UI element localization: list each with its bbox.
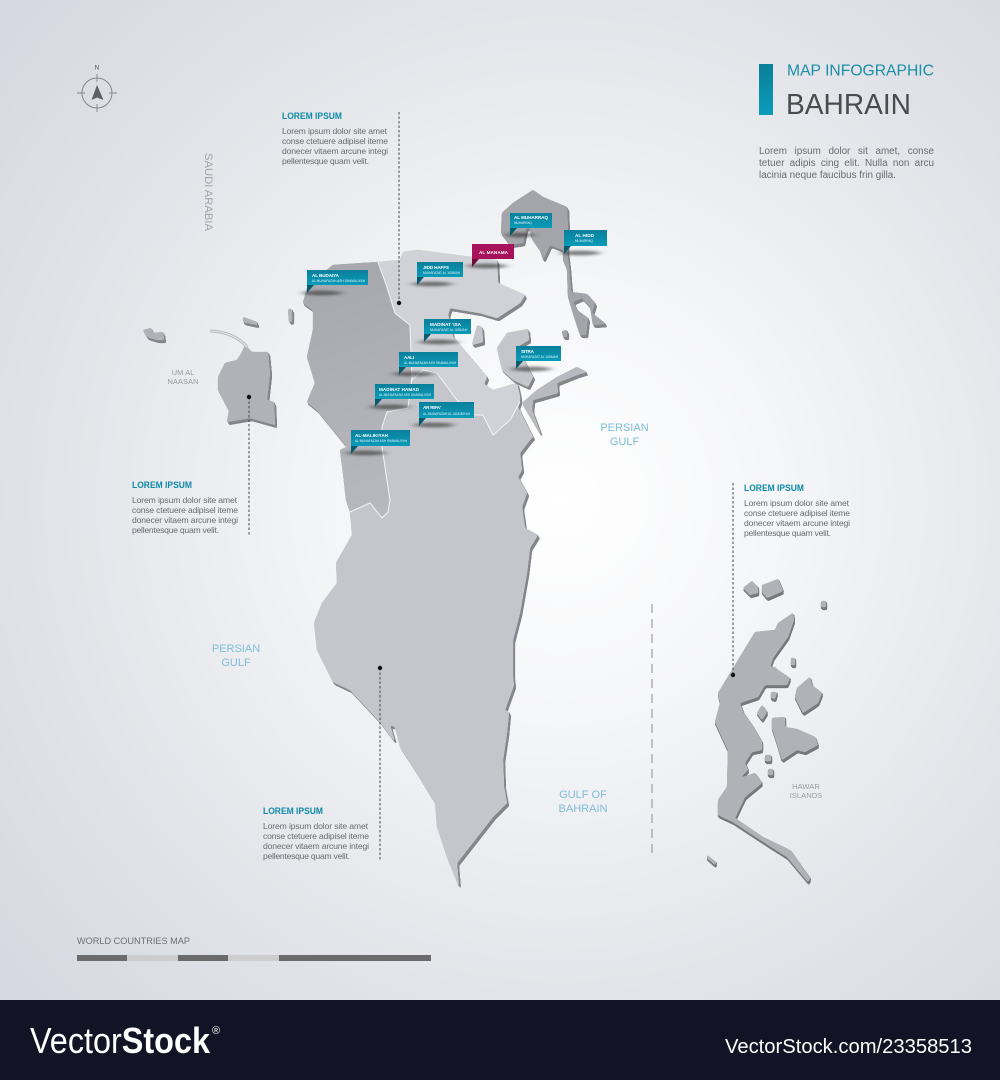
water label: Persian Gulf east: GULF [610,436,639,448]
flag: Al Muharraq: AL MUHARRAQ [514,215,548,220]
callout: south [263,666,382,861]
title block: MAP INFOGRAPHIC [787,62,934,80]
intro text: lacinia neque faucibus frin gilla. [759,170,896,181]
callout: east: pellentesque quam velit. [744,528,831,538]
callout: east: Lorem ipsum dolor site amet [744,498,850,508]
scale bar [77,955,431,961]
callout: south: Lorem ipsum dolor site amet [263,821,369,831]
callout: east: donecer vitaem arcune integi [744,518,850,528]
flag: Al Muharraq: MUHARRAQ [514,221,533,225]
flag: Madinat Isa: MUHAFAZAT AL 'ASIMAH [430,328,468,332]
callout: north: Lorem ipsum dolor site amet [282,126,388,136]
compass [77,64,117,112]
flag: Al Hidd: AL HIDD [575,233,595,238]
callout: south: donecer vitaem arcune integi [263,841,369,851]
flag: Al Manama (capital): AL MANAMA [479,250,509,255]
map: Muharraq and northern islands [288,190,606,437]
flag: Madinat Isa: MADINAT 'ISA [430,322,462,327]
intro text: tetuer adipis cing elit. Nulla non arcu [759,158,934,169]
flag: Aali [393,352,458,376]
callout: south: LOREM IPSUM [263,806,323,816]
flag: Madinat Isa [419,319,471,344]
footer bar: ® [212,1025,220,1037]
water label: Persian Gulf west: GULF [221,657,251,669]
callout: north: conse ctetuere adipisel iteme [282,136,388,146]
flag: Al Budaiya: AL BUDAIYA [312,273,340,278]
callout: east [731,483,850,677]
footer bar [0,1000,1000,1080]
flag: Al-Malikiyah: AL MUHAFAZAH ASH SHAMALIYAH [355,439,408,443]
flag: Madinat Hamad: MADINAT HAMAD [379,387,420,392]
flag: Madinat Hamad [370,384,434,410]
callout: south: conse ctetuere adipisel iteme [263,831,369,841]
footer url: VectorStock.com/23358513 [725,1036,972,1058]
flag: Al-Malikiyah [346,430,410,456]
island label: Um Al Naasan: UM AL [172,368,194,377]
title block [759,62,934,121]
dashed divider [651,604,653,856]
callout: east: conse ctetuere adipisel iteme [744,508,850,518]
callout: west: LOREM IPSUM [132,480,192,490]
map: Um Al Naasan [143,317,275,425]
island label: Um Al Naasan: NAASAN [167,377,199,386]
flag: Ar Rifa [414,402,474,428]
title block: BAHRAIN [786,89,911,121]
flag: Ar Rifa: AL-MUHAFAZAH AL JANUBIYAH [423,412,471,416]
flag: Al Budaiya: AL MUHAFAZAH ASH SHAMALIYAH [312,279,366,283]
flag: Aali: AL MUHAFAZAH ASH SHAMALIYAH [404,361,457,365]
flag: Ar Rifa: AR RIFA' [423,405,441,410]
callout: north [282,111,401,305]
scale label: WORLD COUNTRIES MAP [77,936,190,946]
flag: Al-Malikiyah: AL-MALIKIYAH [355,433,389,438]
intro text [759,146,934,181]
callout: north: pellentesque quam velit. [282,156,369,166]
flag: Jidd Haffs [412,262,463,286]
callout: west [132,395,251,535]
flag: Al Hidd: MUHARRAQ [575,239,594,243]
callout: west: donecer vitaem arcune integi [132,515,238,525]
flag: Al Manama (capital) [467,244,514,268]
region borders [350,262,520,518]
water label: Gulf of Bahrain: GULF OF [559,789,607,801]
flag: Jidd Haffs: MUHAFAZAT AL 'ASIMAH [423,271,461,275]
callout: east: LOREM IPSUM [744,483,804,493]
flag: Al Muharraq [506,213,552,238]
flag: Al Budaiya [302,270,368,296]
map: Hawar islands [707,579,826,882]
country label: Saudi Arabia: SAUDI ARABIA [202,153,214,232]
flag: Sitra [511,346,561,372]
callout: west: pellentesque quam velit. [132,525,219,535]
flag: Madinat Hamad: AL MUHAFAZAH ASH SHAMALIYAH [379,393,432,397]
island label: Hawar Islands: ISLANDS [790,791,822,800]
water label: Gulf of Bahrain: BAHRAIN [559,803,608,815]
callout: west: conse ctetuere adipisel iteme [132,505,238,515]
callout: north: donecer vitaem arcune integi [282,146,388,156]
flag: Aali: AALI [404,355,414,360]
intro text: Lorem ipsum dolor sit amet, conse [759,146,934,157]
callout: south: pellentesque quam velit. [263,851,350,861]
footer logo: VectorStock [30,1020,211,1061]
island label: Hawar Islands: HAWAR [792,782,820,791]
map: main island [303,250,538,887]
flag: Sitra: MUHAFAZAT AL 'ASIMAH [521,355,559,359]
compass: N [95,64,100,72]
flag: Al Hidd [560,230,607,256]
water label: Persian Gulf west: PERSIAN [212,643,260,655]
callout: north: LOREM IPSUM [282,111,342,121]
water label: Persian Gulf east: PERSIAN [600,422,649,434]
flag: Jidd Haffs: JIDD HAFFS [423,265,449,270]
callout: west: Lorem ipsum dolor site amet [132,495,238,505]
flag: Sitra: SITRA [521,349,535,354]
